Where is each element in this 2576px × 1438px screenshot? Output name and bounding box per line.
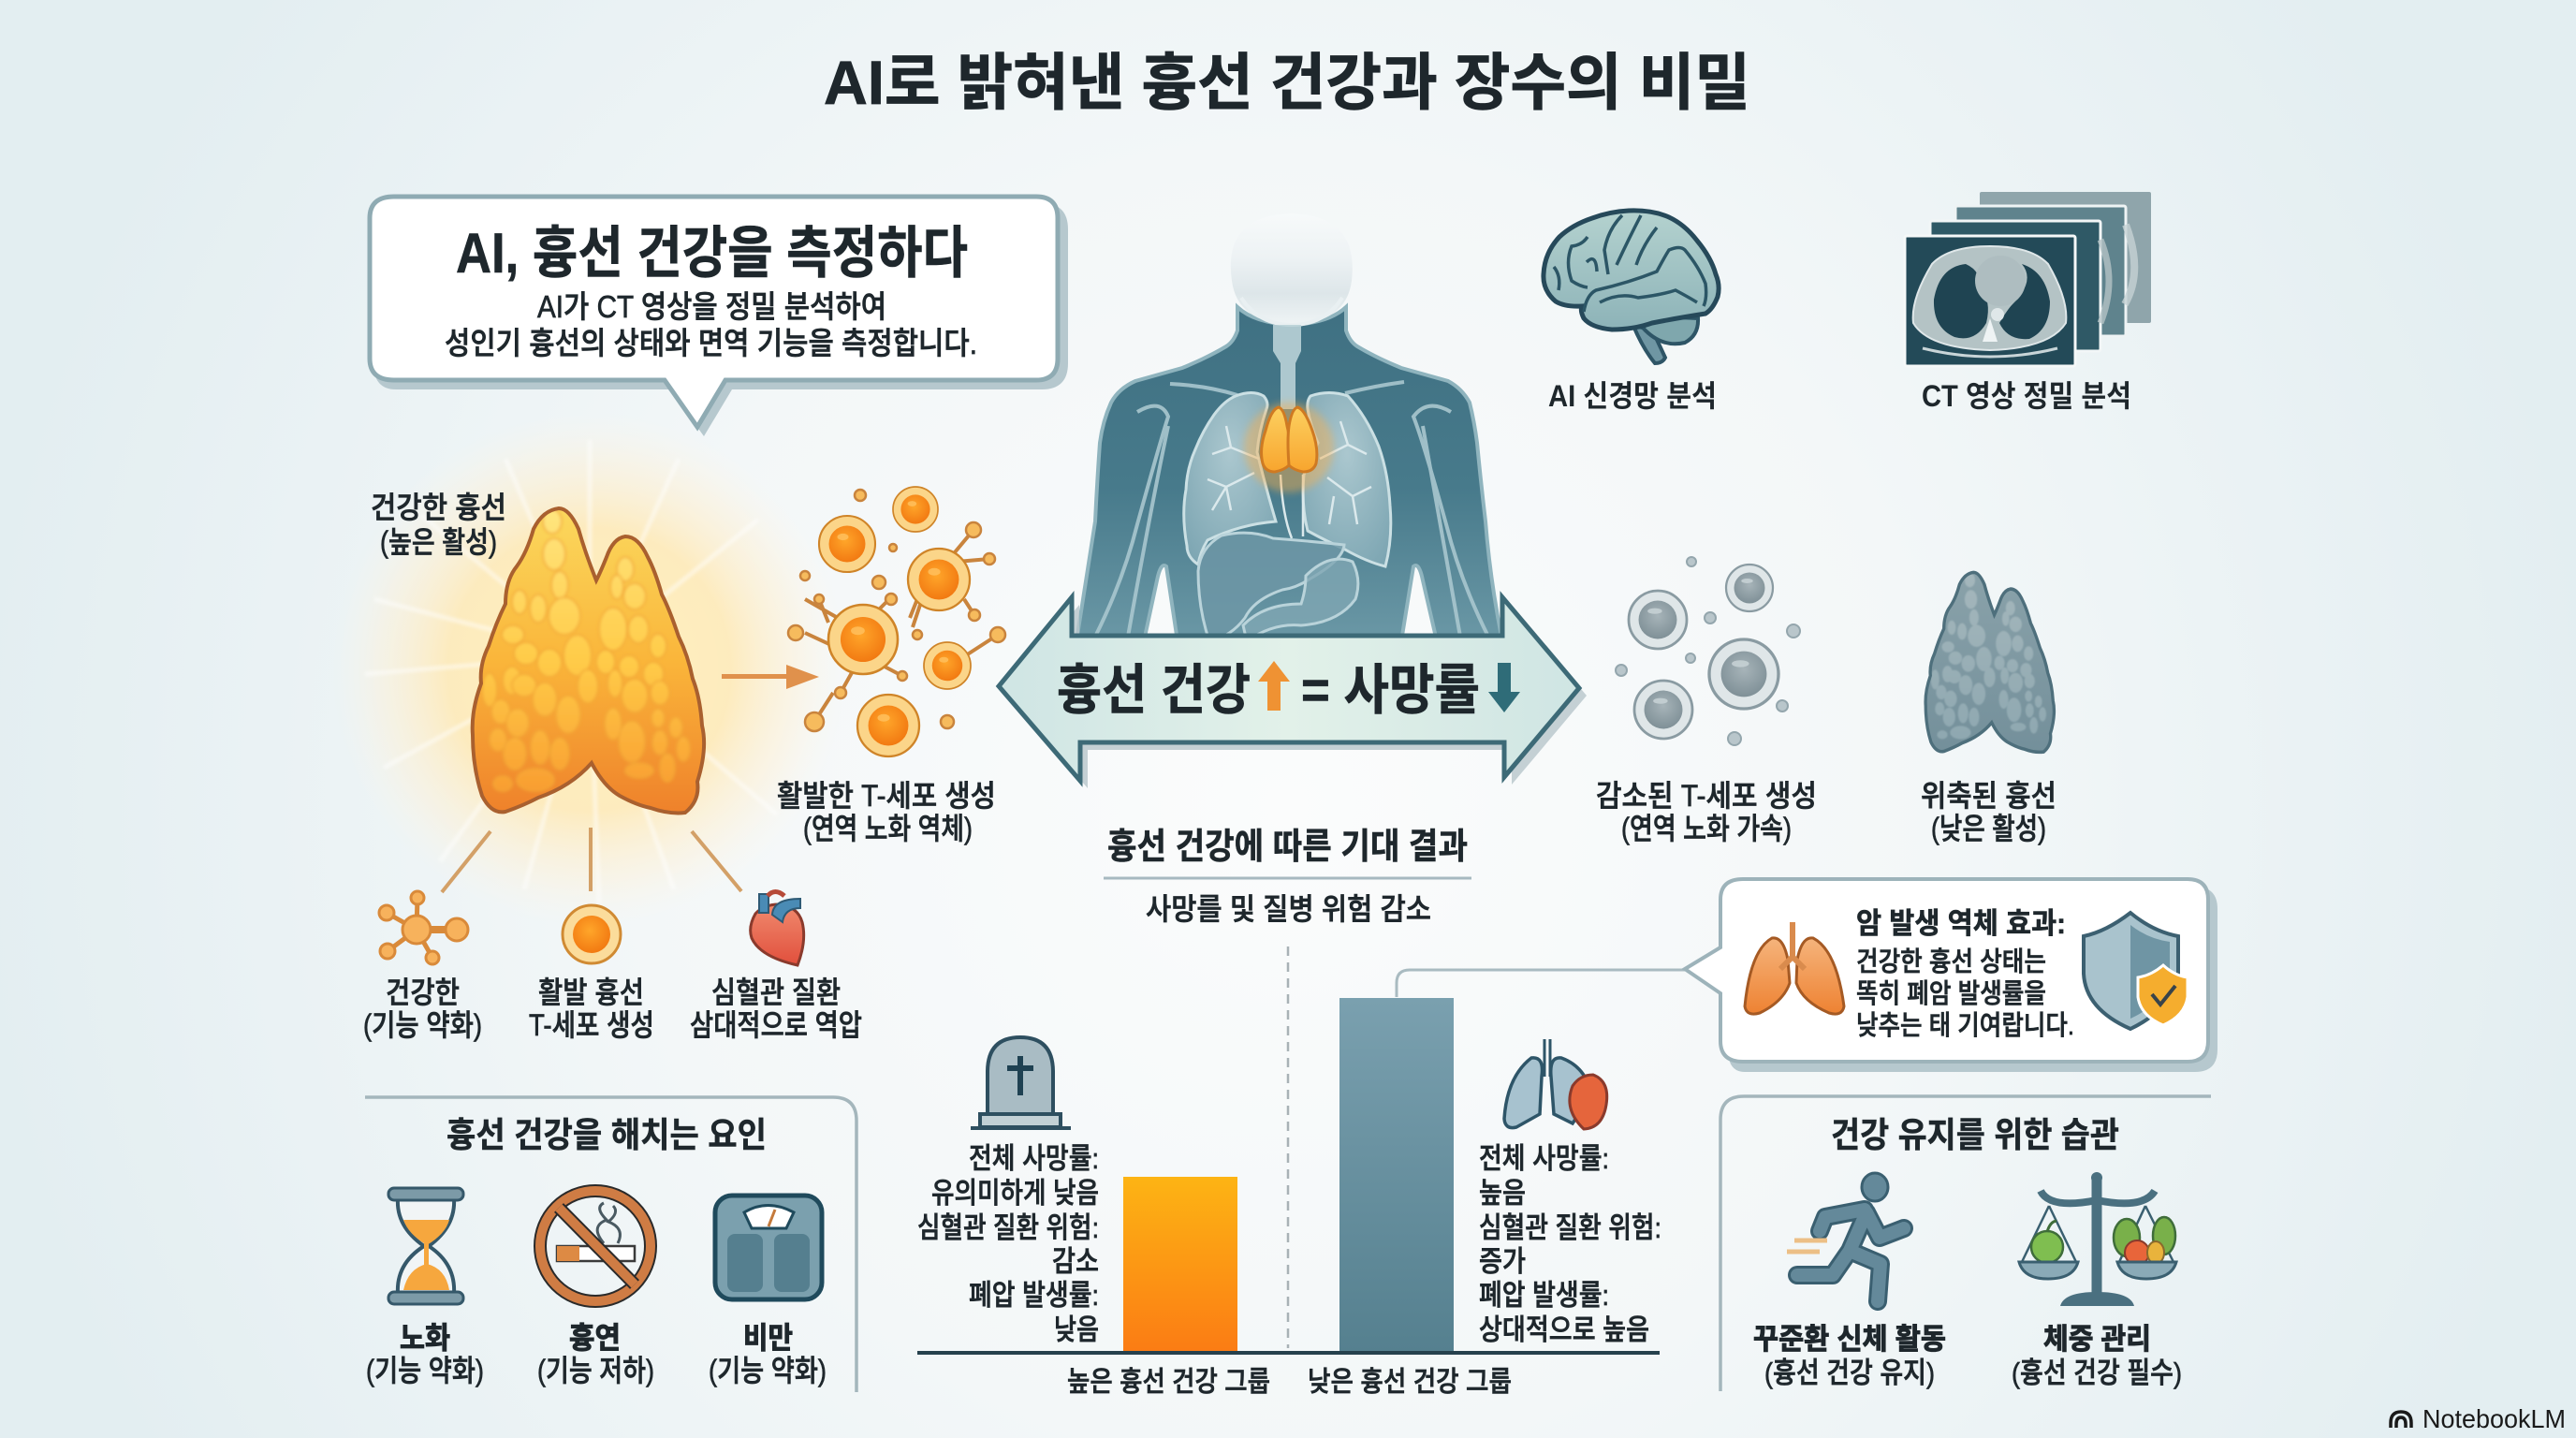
glowing thyroid in torso [1244,403,1334,492]
labels: healthy habits: 체중 관리 [2043,1323,2151,1356]
labels: three thyroid benefits: 심혈관 질환 [711,976,841,1009]
text: low group outcomes: 증가 [1479,1245,1526,1278]
icon: atrophied thyroid [1925,572,2054,752]
labels: three thyroid benefits: 활발 흉선 [538,976,644,1009]
callout body: 똑히 폐암 발생률을 [1856,978,2046,1009]
icon: no smoking [540,1191,651,1301]
label: active T-cell production [777,779,996,845]
thyroid radiance [332,412,847,927]
icon: reduced T-cells [1616,557,1800,745]
label: AI neural network: AI 신경망 분석 [1548,379,1717,413]
icon: down arrow [1488,663,1520,712]
labels: reduced T-cells and atrophied thyroid [1596,779,2056,845]
bronchi and esophagus [1208,421,1371,538]
lungs [1184,393,1391,566]
connector from bar to callout [1397,970,1685,997]
labels: three thyroid benefits: 건강한 [386,976,460,1009]
banner: double arrow [999,597,1587,788]
callout body [1856,946,2074,1041]
text: low group outcomes: 심혈관 질환 위험: [1479,1211,1661,1244]
arrow: thyroid to T-cells [722,665,819,689]
illustration: translucent human torso [1076,213,1502,641]
callout body text [445,289,977,360]
axis labels [1067,1367,1512,1398]
callout body text: 성인기 흉선의 상태와 면역 기능을 측정합니다. [445,326,977,360]
labels: three thyroid benefits: T-세포 생성 [529,1008,654,1042]
icon: healthy thyroid [473,508,704,813]
icon: molecule [379,891,468,964]
labels: harmful factors: (기능 약화) [709,1354,827,1387]
icon: lungs and heart [1504,1039,1607,1129]
CT cross-section [1913,246,2066,357]
bar: high thymus health [1123,1177,1237,1352]
labels: harmful factors [366,1321,827,1387]
subheading: risk reduction: 사망를 및 질병 위험 감소 [1146,892,1431,926]
torso silhouette [1076,307,1502,641]
labels: reduced T-cells and atrophied thyroid: 감소된 T-세포 생성 [1596,779,1817,813]
labels: harmful factors: (기능 저하) [537,1354,654,1387]
labels: three thyroid benefits: (기능 약화) [363,1008,482,1042]
liver [1198,533,1344,641]
icon: weight scale [715,1196,822,1299]
text: high group outcomes: 유의미하게 낮음 [931,1177,1099,1210]
labels: three thyroid benefits [363,976,862,1042]
banner equation text: = 사망률 [1301,660,1480,721]
icon: tombstone [971,1037,1071,1128]
label: healthy thyroid: (높은 활성) [380,525,497,559]
text: high group outcomes: 심혈관 질환 위험: [917,1211,1099,1244]
text: low group outcomes [1479,1142,1661,1346]
labels: healthy habits: 꾸준환 신체 활동 [1753,1323,1946,1356]
label: CT precision analysis: CT 영상 정밀 분석 [1922,379,2131,413]
icon: brain [1544,211,1719,363]
panel: healthy habits [1720,1096,2211,1391]
bar chart [917,946,1660,1398]
callout body: 건강한 흉선 상태는 [1856,946,2046,977]
labels: reduced T-cells and atrophied thyroid: (낮은 활성) [1931,812,2046,845]
callout body text: AI가 CT 영상을 정밀 분석하여 [537,289,886,324]
panel: factors harming thymus [365,1097,856,1392]
callout body: 낮추는 태 기여랍니다. [1856,1010,2074,1041]
trachea [1273,325,1301,409]
text: high group outcomes: 전체 사망률: [969,1142,1099,1175]
text: low group outcomes: 전체 사망률: [1479,1142,1609,1175]
labels: harmful factors: 흉연 [569,1321,621,1355]
text: low group outcomes: 높음 [1479,1177,1526,1210]
labels: healthy habits: (흉선 건강 필수) [2012,1357,2182,1389]
icon: balance scale [2019,1172,2176,1306]
connector lines from thyroid [442,828,741,892]
callout heading: 암 발생 역체 효과: [1856,907,2066,940]
banner text: 흉선 건강 [1057,660,1251,721]
labels: reduced T-cells and atrophied thyroid: (연역 노화 가속) [1621,812,1792,845]
chin line [1241,298,1342,325]
watermark: NotebookLM: NotebookLM [2422,1404,2566,1433]
label: healthy thyroid: 건강한 흉선 [371,491,506,524]
icon: orange lungs [1745,922,1844,1014]
label: active T-cell production: (연역 노화 역체) [803,812,973,845]
text: high group outcomes: 감소 [1052,1245,1099,1278]
axis labels: 높은 흉선 건강 그룹 [1067,1367,1270,1398]
icon: runner [1787,1173,1904,1301]
heading: expected results: 흉선 건강에 따른 기대 결과 [1107,828,1468,867]
labels: healthy habits: (흉선 건강 유지) [1764,1357,1935,1389]
stomach [1243,559,1358,641]
label: healthy thyroid [371,491,506,559]
faded head [1231,213,1353,325]
text: low group outcomes: 상대적으로 높음 [1479,1313,1649,1346]
labels: harmful factors: (기능 약화) [366,1354,484,1387]
icon: active thymus cell [563,905,621,963]
icon: CT scan stack [1905,192,2151,366]
labels: harmful factors: 노화 [400,1321,450,1355]
labels: healthy habits [1753,1323,2182,1389]
axis labels: 낮은 흉선 건강 그룹 [1308,1367,1512,1398]
title: AI로 밝혀낸 흉선 건강과 장수의 비밀 [824,48,1750,117]
panel: AI measurement speech bubble [370,197,1068,436]
labels: harmful factors: 비만 [743,1321,793,1355]
icon: heart [751,891,804,965]
labels: reduced T-cells and atrophied thyroid: 위축된 흉선 [1921,779,2056,813]
callout heading: AI, 흉선 건강을 측정하다 [456,222,968,285]
icon: active T-cell cluster [788,487,1005,756]
text: high group outcomes: 낮음 [1054,1313,1099,1346]
panel heading: 흉선 건강을 해치는 요인 [446,1116,767,1154]
text: high group outcomes: 폐압 발생률: [969,1279,1099,1312]
panel heading: 건강 유지를 위한 습관 [1831,1116,2119,1154]
icon: shield [2084,913,2188,1029]
text: low group outcomes: 폐압 발생률: [1479,1279,1609,1312]
text: high group outcomes [917,1142,1099,1346]
bar: low thymus health [1339,998,1454,1352]
label: active T-cell production: 활발한 T-세포 생성 [777,779,996,813]
icon: hourglass [388,1188,463,1304]
panel: cancer prevention callout [1685,879,2217,1072]
labels: three thyroid benefits: 삼대적으로 역압 [690,1008,862,1042]
icon: up arrow [1258,661,1290,711]
